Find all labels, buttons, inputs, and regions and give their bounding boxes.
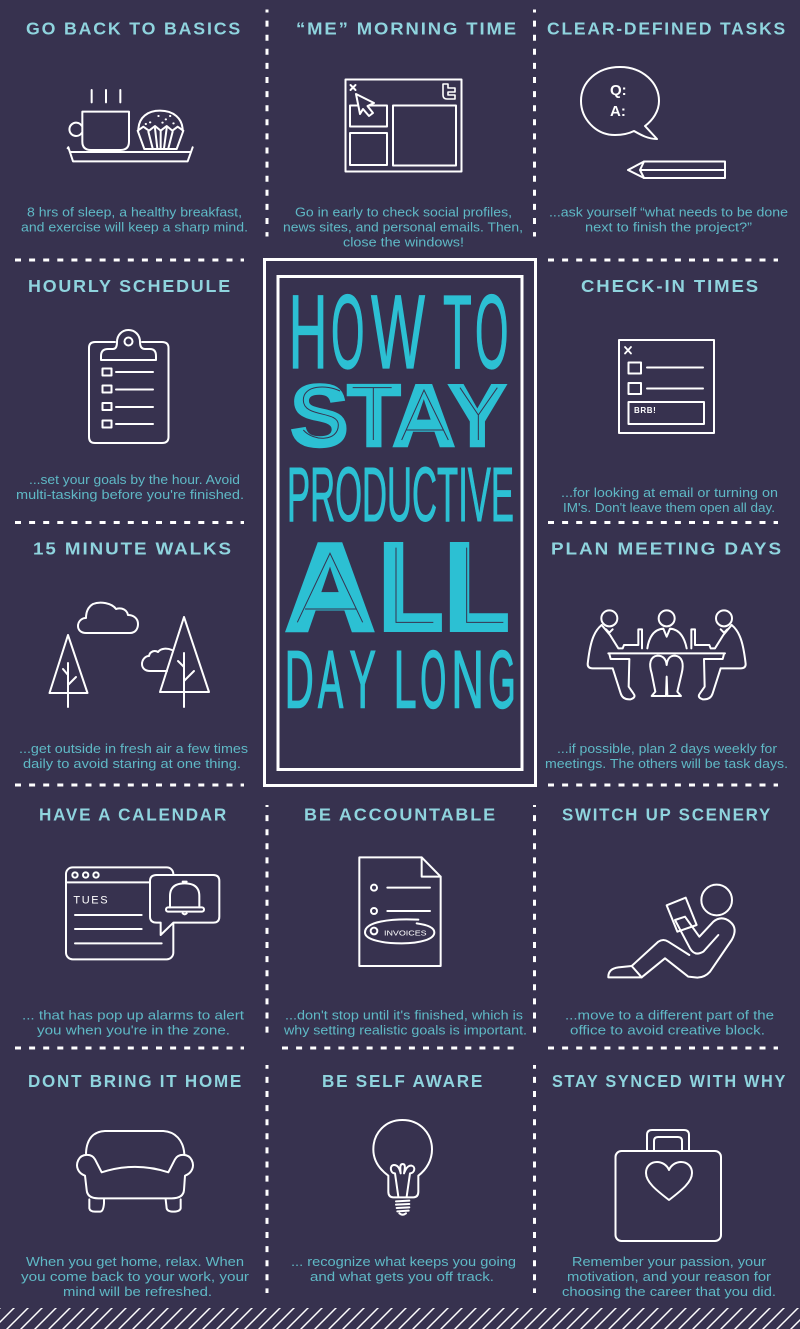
body text: meetings. The others will be task days. [545, 756, 788, 771]
title: how to stay productive all day long: L [394, 634, 416, 726]
body text [21, 204, 248, 234]
title: how to stay productive all day long: T [443, 274, 472, 391]
body text [16, 472, 244, 502]
title: how to stay productive all day long: A [286, 520, 374, 656]
icon: clipboard checklist [89, 330, 168, 443]
body text: why setting realistic goals is important. [283, 1022, 527, 1038]
icon: pencil [628, 162, 725, 178]
icon: chat window with checkboxes: BRB! [634, 406, 656, 415]
panel: 15 minute walks [19, 538, 249, 771]
body text: choosing the career that you did. [562, 1284, 776, 1299]
body text [549, 204, 788, 234]
heading: stay synced with why: STAY SYNCED WITH WHY [552, 1071, 787, 1091]
body text [22, 1008, 244, 1038]
body text [565, 1008, 774, 1038]
panel: hourly schedule [16, 276, 244, 502]
body text: Go in early to check social profiles, [295, 204, 512, 220]
panel: dont bring it home [21, 1071, 250, 1299]
heading: switch up scenery: SWITCH UP SCENERY [562, 804, 772, 824]
title: how to stay productive all day long [285, 274, 516, 726]
body text: ...if possible, plan 2 days weekly for [557, 741, 778, 756]
body text: 8 hrs of sleep, a healthy breakfast, [27, 204, 242, 220]
body text: ...ask yourself “what needs to be done [549, 204, 788, 220]
icon: invoice document: INVOICES [384, 930, 427, 937]
heading: be self aware: BE SELF AWARE [322, 1071, 484, 1091]
panel: clear-defined tasks [547, 18, 788, 234]
title: how to stay productive all day long: L [379, 520, 443, 656]
heading: 15 minute walks: 15 MINUTE WALKS [33, 538, 233, 558]
body text: ...move to a different part of the [565, 1008, 774, 1022]
body text: daily to avoid staring at one thing. [23, 756, 241, 771]
title: how to stay productive all day long: H [289, 274, 327, 391]
body text [283, 204, 523, 250]
bottom diagonal stripes [0, 1308, 800, 1329]
body text: ... that has pop up alarms to alert [22, 1008, 244, 1022]
panel: central title [264, 260, 536, 786]
title frame [264, 260, 536, 786]
title: how to stay productive all day long: L [445, 520, 509, 656]
panel: be self aware [291, 1071, 516, 1284]
icon: speech bubble with Q and A: Q: [610, 82, 627, 99]
icon: speech bubble with Q and A [581, 67, 659, 139]
heading: hourly schedule: HOURLY SCHEDULE [28, 276, 232, 296]
title: how to stay productive all day long: STAY [290, 366, 507, 465]
body text: mind will be refreshed. [63, 1284, 212, 1299]
body text: close the windows! [343, 234, 464, 250]
body text [291, 1254, 516, 1284]
body text: ...get outside in fresh air a few times [19, 741, 249, 756]
icon: browser windows with cursor [346, 80, 462, 172]
heading: me morning time: “ME” MORNING TIME [296, 18, 518, 38]
icon: briefcase with heart [616, 1130, 721, 1241]
title: how to stay productive all day long: Y [350, 634, 375, 726]
heading: plan meeting days: PLAN MEETING DAYS [551, 538, 783, 558]
title: how to stay productive all day long: W [371, 274, 425, 391]
title: how to stay productive all day long: O [420, 634, 446, 726]
title: how to stay productive all day long: A [318, 634, 343, 726]
icon: person reading a book [608, 885, 735, 978]
body text: ...set your goals by the hour. Avoid [29, 472, 240, 487]
panel: check-in times [561, 276, 778, 515]
icon: calendar window with bell alert [66, 867, 219, 959]
body text [562, 1254, 776, 1299]
body text: you come back to your work, your [21, 1269, 250, 1284]
body text: Remember your passion, your [572, 1254, 767, 1269]
body text: IM's. Don't leave them open all day. [563, 500, 775, 515]
body text: ... recognize what keeps you going [291, 1254, 516, 1269]
title: how to stay productive all day long: O [331, 274, 364, 391]
panel: switch up scenery [562, 804, 774, 1038]
heading: clear-defined tasks: CLEAR-DEFINED TASKS [547, 18, 787, 38]
heading: be accountable: BE ACCOUNTABLE [304, 804, 497, 824]
heading: dont bring it home: DONT BRING IT HOME [28, 1071, 243, 1091]
heading: check-in times: CHECK-IN TIMES [581, 276, 760, 296]
panel: plan meeting days [545, 538, 788, 771]
heading: have a calendar: HAVE A CALENDAR [39, 804, 228, 824]
body text: ...for looking at email or turning on [561, 485, 778, 500]
body text [19, 741, 249, 771]
panel: stay synced with why [552, 1071, 787, 1299]
panel: be accountable [283, 804, 527, 1038]
icon: coffee and muffin on a tray [68, 90, 193, 161]
text: PRODUCTIVE [287, 452, 514, 538]
body text: next to finish the project?” [585, 220, 752, 234]
body text: motivation, and your reason for [567, 1269, 772, 1284]
body text: office to avoid creative block. [570, 1022, 765, 1038]
icon: light bulb [373, 1120, 432, 1215]
panel: central title: O [475, 274, 508, 391]
body text: news sites, and personal emails. Then, [283, 220, 523, 234]
title: how to stay productive all day long: N [451, 634, 484, 726]
body text [561, 485, 778, 515]
panel: me morning time [283, 18, 523, 250]
icon: chat window with checkboxes [619, 340, 714, 433]
body text: When you get home, relax. When [26, 1254, 244, 1269]
body text: you when you're in the zone. [37, 1022, 230, 1038]
body text: ...don't stop until it's finished, which is [285, 1008, 524, 1022]
body text [283, 1008, 527, 1038]
body text: and exercise will keep a sharp mind. [21, 220, 248, 234]
icon: sofa [77, 1131, 193, 1212]
title: how to stay productive all day long: D [285, 634, 314, 726]
icon: calendar window with bell alert: TUES [73, 894, 109, 906]
heading: go back to basics: GO BACK TO BASICS [26, 18, 242, 38]
body text [21, 1254, 250, 1299]
icon: invoice document [359, 857, 441, 966]
icon: three people meeting at a table [588, 610, 746, 699]
body text: multi-tasking before you're finished. [16, 487, 244, 502]
panel: have a calendar [22, 804, 244, 1038]
body text: and what gets you off track. [310, 1269, 494, 1284]
icon: clouds and trees [50, 603, 209, 707]
panel: central title: G [488, 634, 516, 726]
icon: speech bubble with Q and A: A: [610, 103, 626, 120]
body text [545, 741, 788, 771]
panel: go back to basics [21, 18, 248, 234]
